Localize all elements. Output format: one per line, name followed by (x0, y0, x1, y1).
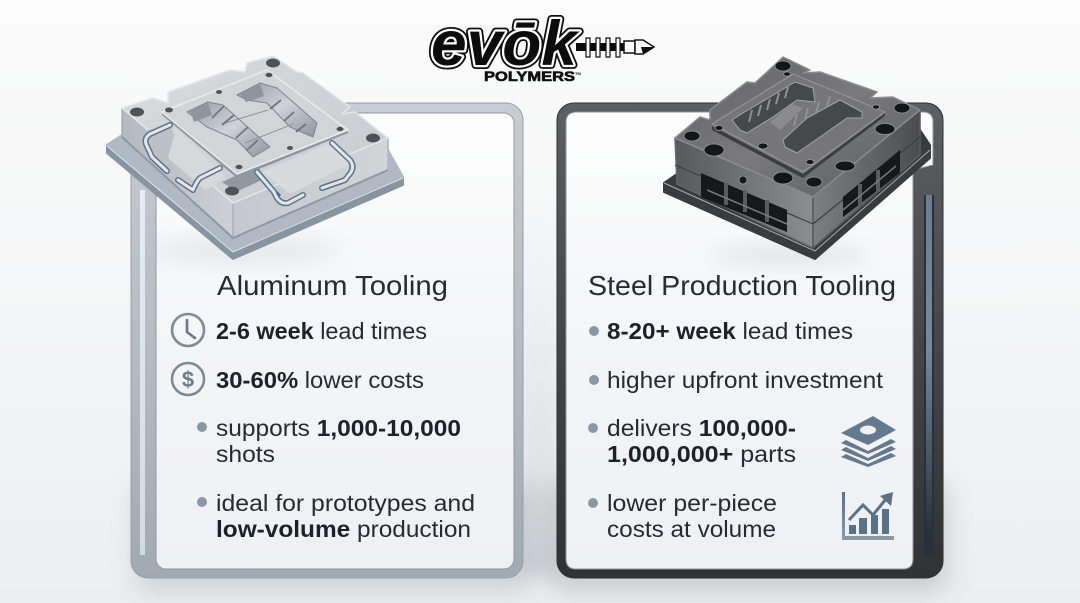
bullet: per-piece costs: lower per-piece (607, 490, 777, 516)
logo: evok polymers: evōk (431, 9, 580, 79)
panel: aluminum tooling (131, 103, 523, 578)
cavities (187, 102, 270, 157)
icon: dollar: $ (182, 367, 194, 392)
raised plate (712, 113, 885, 178)
cavities (732, 82, 815, 133)
logo: evok polymers: TM (575, 71, 581, 76)
bullet: ideal for prototypes (197, 490, 475, 542)
cooling tubes (146, 125, 353, 203)
panel: steel production tooling (557, 103, 943, 578)
windows (701, 173, 787, 232)
block sides (122, 108, 233, 238)
bullet: lead times: 8-20+ week lead times (607, 318, 853, 344)
heading: aluminum tooling: Aluminum Tooling (217, 270, 448, 301)
icon: growth chart (842, 492, 894, 540)
mold: aluminum (107, 56, 403, 266)
text: lower costs: 30-60% lower costs (216, 367, 424, 393)
bullet: supports shots: shots (216, 441, 275, 467)
icon: clock (172, 314, 204, 346)
raised plate (162, 110, 348, 178)
heading: steel production tooling: Steel Production Tooling (588, 270, 896, 301)
block top (122, 56, 388, 203)
bullet: upfront investment: higher upfront investment (607, 367, 883, 393)
block sides (675, 138, 813, 248)
bullet: supports shots: supports 1,000-10,000 (216, 415, 461, 441)
bullet: ideal for prototypes: low-volume production (216, 516, 471, 542)
bullet: per-piece costs: costs at volume (607, 516, 776, 542)
bullet: delivers parts: delivers 100,000- (607, 415, 796, 441)
logo: evok polymers: evōk (431, 9, 580, 79)
logo: evok polymers: POLYMERS (484, 69, 575, 84)
base plate (664, 130, 930, 259)
base plate (107, 137, 403, 259)
bullet: delivers parts (588, 415, 796, 467)
icon: stack of bills (841, 416, 896, 467)
mold: steel (664, 57, 930, 267)
text: lead times: 2-6 week lead times (216, 318, 427, 344)
holes (130, 58, 380, 196)
bullet: supports shots (197, 415, 461, 467)
bullet: per-piece costs (588, 490, 777, 542)
icon: dollar (172, 363, 204, 395)
logo: evok polymers (431, 9, 654, 84)
bullet: ideal for prototypes: ideal for prototypes and (216, 490, 475, 516)
holes (684, 61, 910, 187)
icon: screw (576, 38, 654, 57)
bullet: delivers parts: 1,000,000+ parts (607, 441, 796, 467)
block top (675, 57, 920, 197)
channels (148, 124, 176, 172)
